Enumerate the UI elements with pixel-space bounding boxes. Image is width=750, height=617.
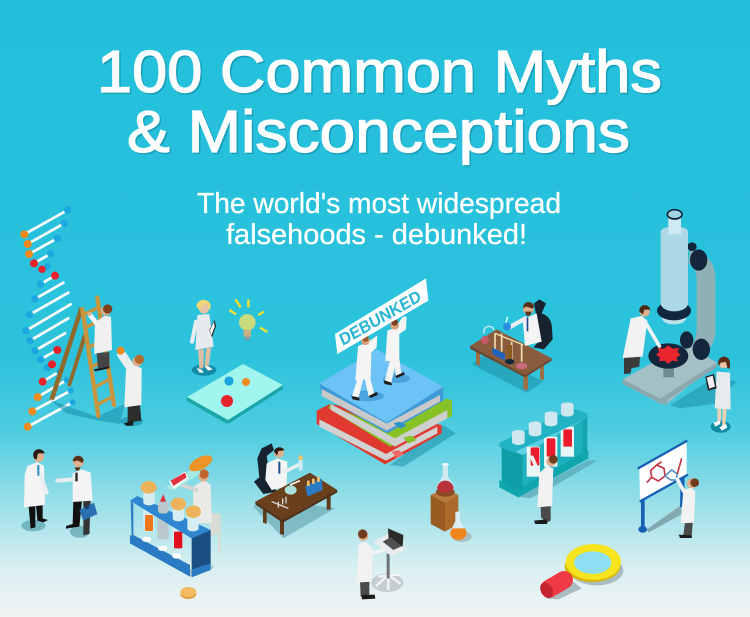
scientist at desk with tubes bbox=[253, 443, 337, 538]
scientists on books bbox=[351, 317, 410, 401]
dna helix bbox=[20, 206, 76, 431]
title bbox=[97, 39, 664, 166]
test tube rack teal bbox=[499, 402, 597, 498]
subtitle: The world's most widespread bbox=[197, 188, 561, 220]
bottom left illustration group bbox=[21, 443, 337, 599]
scientist with clipboard bbox=[192, 300, 216, 376]
test tube rack blue bbox=[130, 481, 213, 577]
stack of books bbox=[317, 349, 456, 467]
scientist at laptop bbox=[357, 528, 407, 599]
subtitle bbox=[197, 188, 561, 251]
scientist at microscope bbox=[623, 305, 659, 374]
bottom right illustration group bbox=[357, 402, 699, 600]
whiteboard with molecule bbox=[638, 441, 688, 533]
table with balls bbox=[187, 364, 283, 424]
debunked sign: DEBUNKED bbox=[337, 286, 424, 350]
scientist on ladder bbox=[87, 304, 112, 371]
pill bbox=[180, 587, 196, 599]
title: 100 Common Myths bbox=[97, 39, 662, 105]
icon: light bulb bbox=[229, 299, 267, 340]
magnifying glass bbox=[538, 544, 623, 600]
subtitle: falsehoods - debunked! bbox=[226, 219, 527, 251]
ladder bbox=[49, 298, 125, 424]
flask on box bbox=[431, 463, 458, 532]
orange flask bbox=[450, 512, 472, 542]
left illustration group bbox=[20, 206, 267, 431]
microscope bbox=[623, 210, 737, 408]
scientist holding ball bbox=[117, 347, 144, 426]
scientist at lab desk bbox=[470, 299, 553, 393]
center illustration group bbox=[317, 278, 553, 467]
title: 100 Common Myths bbox=[98, 40, 664, 106]
scientist at whiteboard bbox=[677, 478, 699, 538]
two scientists talking bbox=[21, 449, 97, 538]
title: & Misconceptions bbox=[128, 100, 632, 166]
right top illustration group bbox=[623, 210, 737, 433]
scientist behind rack with pipette bbox=[166, 452, 221, 554]
scientist with clipboard and skirt bbox=[705, 357, 731, 433]
scientist at teal rack bbox=[532, 455, 558, 524]
title: & Misconceptions bbox=[127, 99, 630, 165]
